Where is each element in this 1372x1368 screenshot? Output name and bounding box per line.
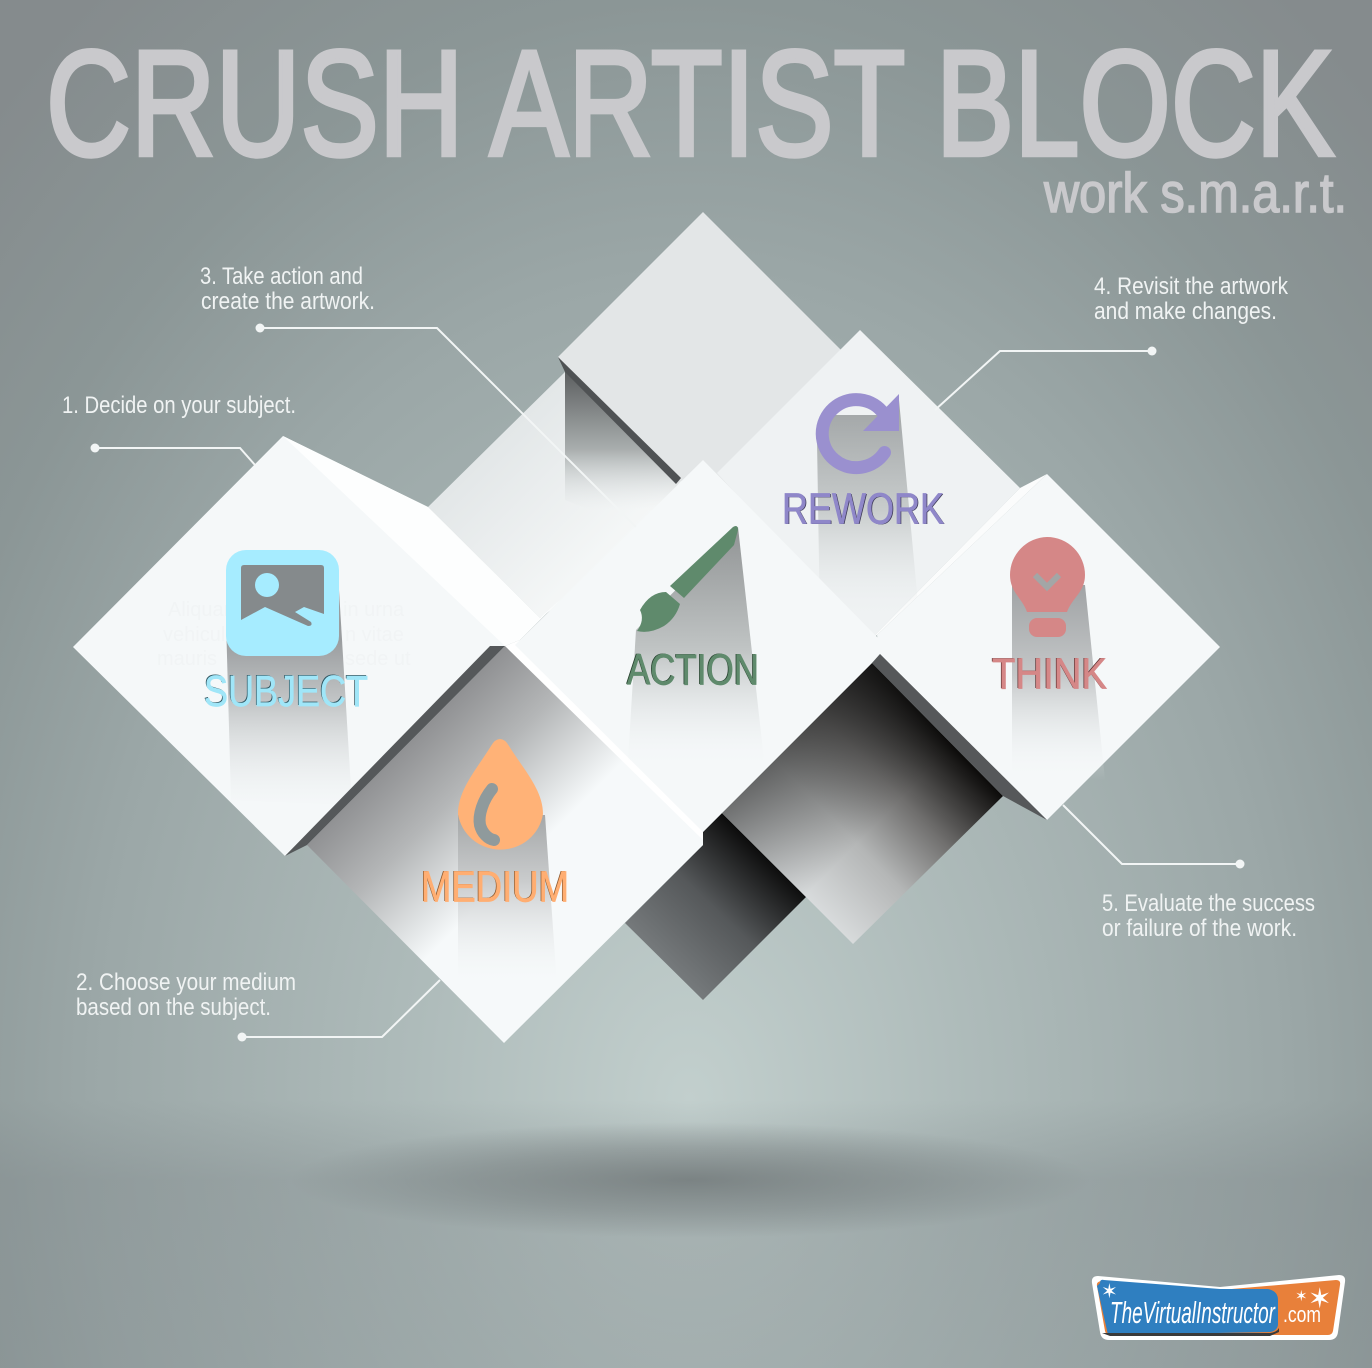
callout 2: based on the subject. bbox=[76, 994, 271, 1021]
icon: drop bbox=[458, 739, 543, 850]
callout 5: or failure of the work. bbox=[1102, 915, 1297, 942]
logo text: TheVirtualInstructor bbox=[1110, 1295, 1276, 1330]
icon shadow: subject bbox=[226, 590, 352, 805]
callout 5: 5. Evaluate the success bbox=[1102, 890, 1315, 917]
callout 3: create the artwork. bbox=[201, 288, 375, 315]
logo sparkles bbox=[1101, 1281, 1331, 1314]
label: action: ACTION bbox=[626, 645, 758, 694]
callout 4 bbox=[1094, 273, 1289, 325]
panel: action bbox=[515, 460, 880, 832]
callout 2 bbox=[76, 969, 296, 1021]
label: medium: MEDIUM bbox=[420, 862, 568, 911]
white highlight strip: action edge bbox=[505, 640, 703, 840]
ghost text: Aliquam bbox=[168, 599, 240, 621]
logo domain: .com bbox=[1283, 1302, 1321, 1327]
callout 1: 1. Decide on your subject. bbox=[62, 392, 296, 419]
icon: lightbulb bbox=[1010, 537, 1085, 637]
label: think: THINK bbox=[992, 650, 1107, 698]
leader lines and dots bbox=[90, 324, 1244, 1042]
label: rework: REWORK bbox=[782, 484, 944, 534]
ghost text: in urna bbox=[343, 599, 405, 621]
icon: rework arrow bbox=[822, 394, 899, 468]
white wedge: rework to think bbox=[870, 474, 1047, 640]
panel: medium bbox=[307, 640, 703, 1043]
icon: paintbrush bbox=[637, 526, 738, 632]
floor shadow bbox=[290, 1122, 1090, 1238]
ghost text: sede ut bbox=[345, 648, 411, 670]
label: rework: REWORK bbox=[783, 485, 945, 534]
back diamond and folded panels bbox=[428, 212, 900, 618]
icon shadow: rework bbox=[817, 400, 920, 625]
logo sparkles: ✶ bbox=[1308, 1283, 1331, 1314]
callout 4: and make changes. bbox=[1094, 298, 1277, 325]
callout 3: 3. Take action and bbox=[200, 263, 363, 290]
callout 2: 2. Choose your medium bbox=[76, 969, 296, 996]
label: subject: SUBJECT bbox=[204, 667, 368, 716]
callout 5 bbox=[1102, 890, 1315, 942]
icon: picture bbox=[226, 550, 339, 656]
label: think: THINK bbox=[991, 649, 1106, 698]
ghost text: mauris bbox=[157, 648, 217, 670]
dark edge: subject bbox=[285, 646, 505, 856]
icon shadow: think bbox=[1012, 585, 1105, 780]
ghost text: n vitae bbox=[345, 624, 404, 646]
callout 4: 4. Revisit the artwork bbox=[1094, 273, 1289, 300]
logo sparkles: ✶ bbox=[1101, 1281, 1118, 1303]
label: subject: SUBJECT bbox=[203, 666, 367, 715]
ghost text bbox=[157, 599, 411, 670]
logo sparkles: ✶ bbox=[1295, 1288, 1308, 1305]
panel: think bbox=[877, 474, 1220, 820]
label: medium: MEDIUM bbox=[421, 862, 569, 912]
panel: subject bbox=[73, 436, 560, 856]
dark edge: action to think bbox=[872, 654, 1047, 820]
callout 3 bbox=[200, 263, 375, 315]
logo bbox=[1092, 1275, 1345, 1340]
icon shadow: action bbox=[628, 527, 764, 760]
icon shadow: medium bbox=[458, 815, 557, 985]
panel: rework bbox=[717, 330, 1047, 640]
dark lower blocks bbox=[625, 663, 1003, 1000]
label: action: ACTION bbox=[627, 646, 759, 694]
ghost text: vehicula bbox=[163, 624, 237, 646]
